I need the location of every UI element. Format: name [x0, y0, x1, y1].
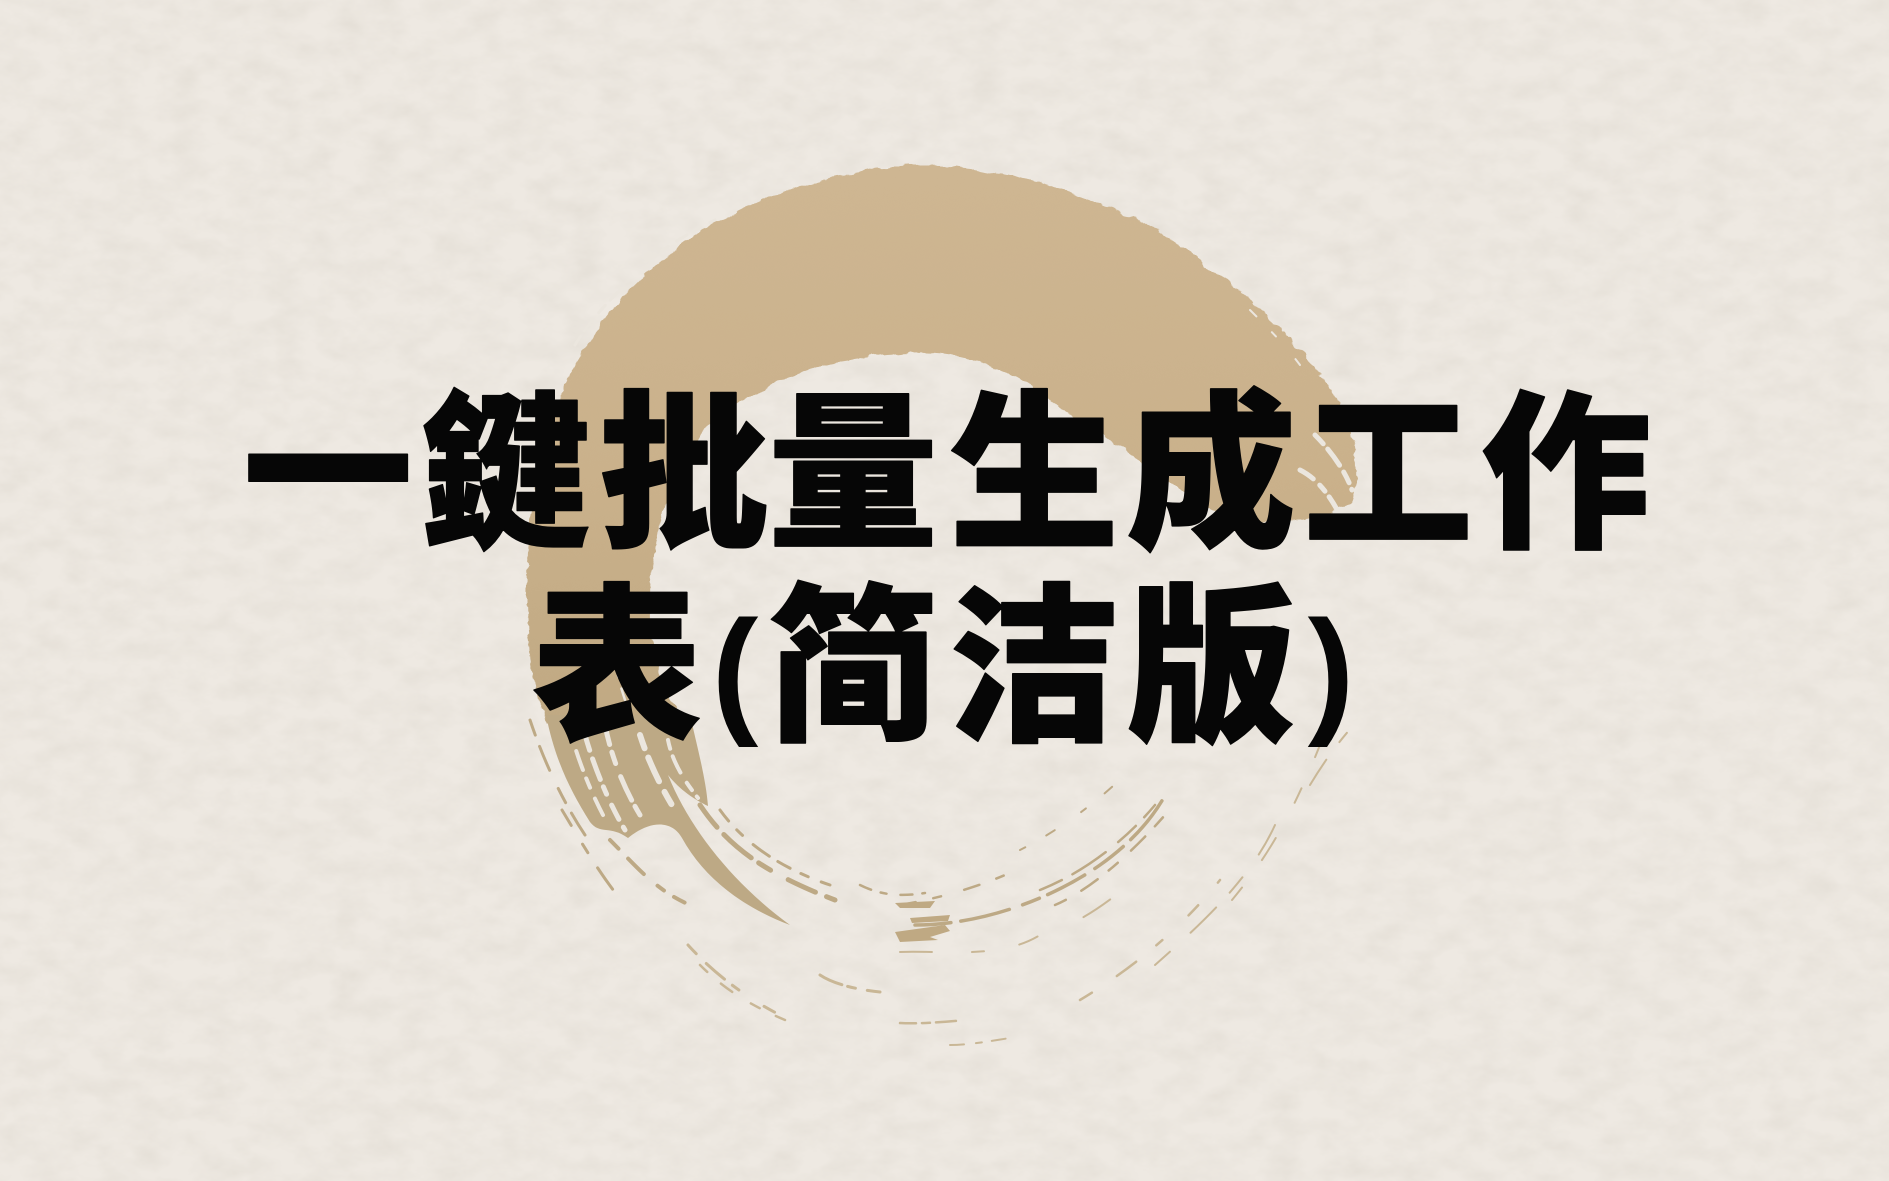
solid crescent brush stroke: [527, 166, 1356, 725]
title line 1: 生: [949, 381, 1119, 571]
streaked tail of the brush stroke: [546, 715, 790, 925]
title line 1: 成: [1126, 381, 1296, 571]
title line 2: 版: [1126, 574, 1296, 764]
title line 2: 简: [768, 574, 938, 764]
title line 2: ): [1308, 591, 1354, 748]
title line 1: 一: [243, 381, 413, 571]
title line 2: 洁: [949, 574, 1119, 764]
title line 1: 工: [1303, 381, 1473, 571]
title: [243, 381, 1651, 764]
title line 1: 批: [599, 381, 769, 571]
dry brush trails, outer ring: [688, 720, 1358, 1045]
concentrated ink marks at the ring bottom: [895, 901, 950, 942]
title line 1: 量: [768, 381, 938, 571]
title line 2: (: [712, 591, 759, 748]
title line 2: 表: [532, 574, 702, 764]
title line 1: 作: [1481, 381, 1651, 571]
pale streaks inside the brush stroke: [570, 220, 1352, 830]
brush circle (enso): [527, 166, 1358, 1045]
dry brush trails, inner ring: [530, 720, 1168, 925]
title line 1: 鍵: [421, 381, 591, 571]
